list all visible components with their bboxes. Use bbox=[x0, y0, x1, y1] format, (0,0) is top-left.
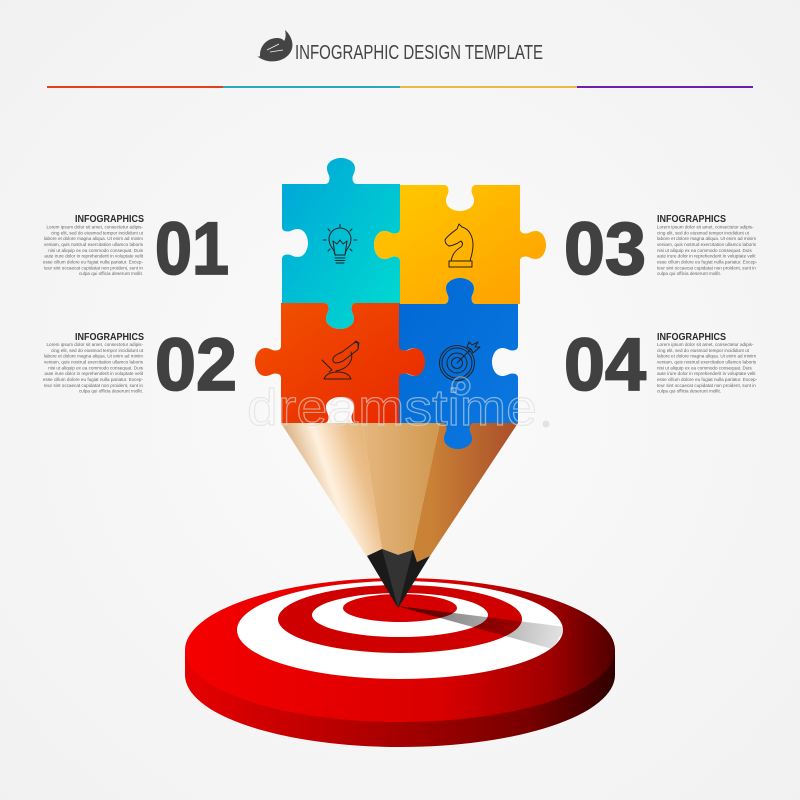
text block 03: labore et dolore magna aliqua. Ut enim ad minim bbox=[657, 236, 756, 241]
text block 04: culpa qui officia deserunt mollit. bbox=[657, 389, 721, 394]
pencil wood left facet bbox=[281, 423, 382, 557]
pencil lead bbox=[367, 549, 430, 608]
text block 04 bbox=[657, 332, 758, 394]
target bullseye bbox=[343, 594, 457, 622]
text block 02: labore et dolore magna aliqua. Ut enim ad minim bbox=[44, 354, 143, 359]
text block 01: aute irure dolor in reprehenderit in voluptate velit bbox=[44, 254, 144, 259]
number 03: 03 bbox=[564, 207, 646, 290]
puzzle piece: cyan bbox=[282, 158, 400, 329]
text block 04: esse cillum dolore eu fugiat nulla pariatur. Excep- bbox=[657, 377, 758, 382]
icon: logo bbox=[257, 30, 292, 61]
text block 01: esse cillum dolore eu fugiat nulla pariatur. Excep- bbox=[43, 260, 143, 264]
text block 03: cing elit, sed do eiusmod tempor incididunt ut bbox=[657, 230, 750, 235]
text block 03: INFOGRAPHICS bbox=[657, 214, 726, 225]
pencil wood right facet bbox=[413, 423, 518, 562]
text block 04: aute irure dolor in reprehenderit in voluptate velit bbox=[657, 371, 756, 376]
text block 04: veniam, quis nostrud exercitation ullamco laboris bbox=[657, 360, 757, 364]
icon: light bulb bbox=[324, 224, 357, 263]
puzzle piece: red bbox=[255, 303, 426, 423]
icon: microscope bbox=[322, 341, 359, 379]
puzzle bbox=[255, 158, 546, 449]
number 01: 01 bbox=[155, 207, 229, 290]
text block 04: cing elit, sed do eiusmod tempor incididunt ut bbox=[657, 348, 750, 353]
text block 02: nisi ut aliquip ex ea commodo consequat. Duis bbox=[48, 365, 144, 370]
number 02: 02 bbox=[155, 323, 237, 406]
watermark: dreamstime bbox=[247, 379, 537, 436]
text block 03 bbox=[657, 214, 758, 276]
target white outer ring bbox=[237, 581, 563, 679]
pencil bbox=[281, 423, 518, 608]
text block 01: Lorem ipsum dolor sit amet, consectetur adipis- bbox=[46, 224, 143, 230]
target white inner ring bbox=[312, 593, 488, 637]
header colour rule bbox=[47, 86, 753, 88]
text block 01: cing elit, sed do eiusmod tempor incididunt ut bbox=[51, 230, 144, 235]
text block 01: INFOGRAPHICS bbox=[75, 214, 144, 225]
text block 03: esse cillum dolore eu fugiat nulla pariatur. Excep- bbox=[657, 260, 758, 264]
text block 01: teur sint occaecat cupidatat non proident, sunt in bbox=[44, 265, 143, 270]
header bbox=[257, 30, 543, 64]
title: INFOGRAPHIC DESIGN TEMPLATE bbox=[295, 42, 543, 64]
text block 01: nisi ut aliquip ex ea commodo consequat. Duis bbox=[48, 248, 144, 253]
text block 03: aute irure dolor in reprehenderit in voluptate velit bbox=[657, 254, 756, 259]
pencil wood middle facet bbox=[362, 423, 440, 555]
text block 04: teur sint occaecat cupidatat non proident, sunt in bbox=[657, 383, 756, 388]
text block 03: culpa qui officia deserunt mollit. bbox=[657, 271, 721, 276]
text block 01: labore et dolore magna aliqua. Ut enim ad minim bbox=[44, 236, 143, 241]
target side wall bbox=[185, 650, 615, 747]
text block 04: INFOGRAPHICS bbox=[657, 332, 726, 343]
text block 03: Lorem ipsum dolor sit amet, consectetur adipis- bbox=[657, 224, 754, 230]
target top surface bbox=[185, 578, 615, 722]
text block 03: nisi ut aliquip ex ea commodo consequat. Duis bbox=[657, 248, 752, 253]
text block 04: Lorem ipsum dolor sit amet, consectetur adipis- bbox=[657, 342, 754, 347]
target board bbox=[185, 578, 615, 747]
icon: chess knight bbox=[445, 224, 473, 267]
text block 02: Lorem ipsum dolor sit amet, consectetur adipis- bbox=[46, 342, 143, 347]
pencil shadow bbox=[397, 606, 566, 649]
text block 02 bbox=[43, 332, 144, 394]
text block 02: culpa qui officia deserunt mollit. bbox=[79, 389, 143, 394]
text block 01 bbox=[43, 214, 144, 276]
text block 02: esse cillum dolore eu fugiat nulla pariatur. Excep- bbox=[43, 377, 143, 382]
text block 01: veniam, quis nostrud exercitation ullamco laboris bbox=[44, 242, 144, 247]
text block 04: labore et dolore magna aliqua. Ut enim ad minim bbox=[657, 354, 756, 359]
text block 02: cing elit, sed do eiusmod tempor incididunt ut bbox=[51, 348, 144, 353]
puzzle piece: yellow bbox=[374, 185, 546, 304]
text block 02: veniam, quis nostrud exercitation ullamco laboris bbox=[44, 360, 144, 364]
icon: target with arrow bbox=[440, 342, 480, 380]
text block 02: INFOGRAPHICS bbox=[75, 332, 144, 343]
text block 01: culpa qui officia deserunt mollit. bbox=[79, 271, 143, 276]
text block 03: teur sint occaecat cupidatat non proident, sunt in bbox=[657, 265, 756, 270]
puzzle piece: blue bbox=[399, 278, 518, 449]
target red ring bbox=[278, 585, 522, 653]
text block 02: teur sint occaecat cupidatat non proident, sunt in bbox=[44, 383, 143, 388]
text block 04: nisi ut aliquip ex ea commodo consequat. Duis bbox=[657, 365, 752, 370]
text block 03: veniam, quis nostrud exercitation ullamco laboris bbox=[657, 242, 757, 247]
text block 02: aute irure dolor in reprehenderit in voluptate velit bbox=[44, 371, 144, 376]
number 04: 04 bbox=[564, 323, 646, 406]
